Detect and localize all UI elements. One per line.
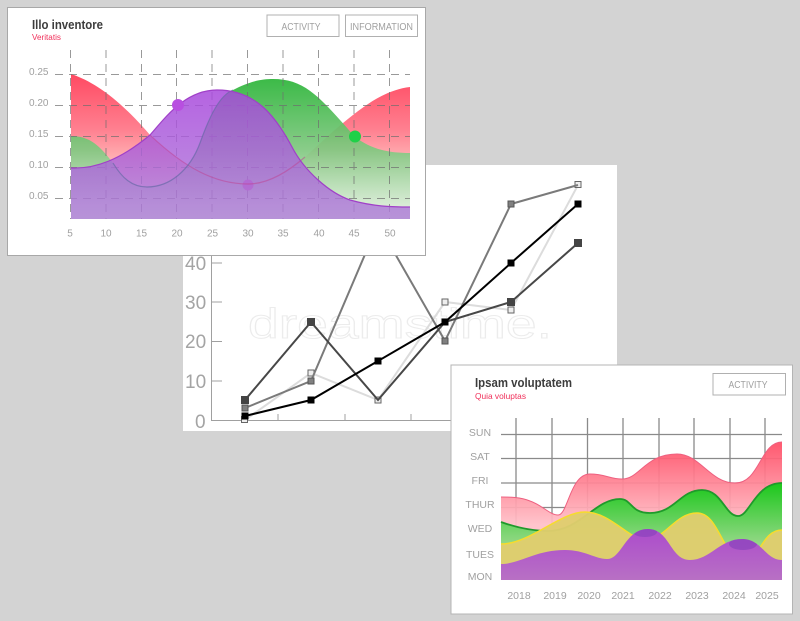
series: light grey (242, 182, 581, 422)
curve line: yellow (501, 512, 782, 560)
line chart y axis labels: 0 (195, 412, 206, 433)
panel: line chart (183, 165, 617, 433)
area: purple (501, 529, 782, 580)
button: activity: ACTIVITY (282, 22, 321, 33)
x axis labels: 2019 (543, 590, 567, 602)
button: information (346, 15, 418, 36)
y axis labels: TUES (466, 549, 494, 561)
x axis labels: 10 (100, 228, 112, 240)
curve line: green (501, 483, 782, 531)
heading: Illo inventore (32, 18, 103, 32)
line chart y axis labels: 40 (185, 254, 206, 275)
y axis labels (465, 427, 495, 583)
subheading: Veritatis (32, 33, 61, 42)
series: dark grey (241, 239, 582, 404)
y axis labels: THUR (465, 499, 495, 511)
line chart y axis labels: 10 (185, 372, 206, 393)
x axis labels: 5 (67, 228, 73, 240)
x axis labels: 2023 (685, 590, 709, 602)
y axis labels: 0.15 (29, 129, 49, 140)
area: yellow (501, 512, 782, 580)
data dot: purple (172, 99, 184, 111)
y axis labels: SAT (470, 451, 490, 463)
data dot: green (349, 130, 361, 142)
x axis labels: 25 (207, 228, 218, 240)
heading: Ipsam voluptatem (475, 376, 572, 390)
x axis labels: 2020 (577, 590, 601, 602)
button: activity (713, 374, 786, 395)
series: mid grey (242, 185, 578, 411)
y axis labels (29, 67, 49, 202)
x axis labels: 20 (171, 228, 183, 240)
y axis labels: WED (468, 523, 493, 535)
curve line: red (501, 442, 782, 515)
subheading: Quia voluptas (475, 391, 526, 401)
line chart axes (211, 255, 460, 420)
y axis labels: MON (468, 571, 492, 583)
button: activity (267, 15, 339, 36)
line chart y axis labels: 30 (185, 293, 206, 314)
y axis labels: SUN (469, 427, 491, 439)
x axis labels: 2024 (722, 590, 746, 602)
x axis labels: 2021 (611, 590, 635, 602)
overlap highlights (633, 527, 757, 550)
area: red (71, 74, 410, 219)
x axis labels: 2025 (755, 590, 779, 602)
x axis labels: 45 (348, 228, 360, 240)
line chart y axis labels: 20 (185, 332, 206, 353)
x axis labels: 35 (277, 228, 289, 240)
watermark: dreamstime. (248, 300, 552, 347)
data dot: pink (242, 180, 254, 190)
x axis labels (507, 590, 779, 602)
x axis labels: 30 (242, 228, 254, 240)
y axis labels: 0.05 (29, 191, 49, 202)
curve line: hidden red (150, 135, 305, 184)
chart grid (501, 418, 782, 530)
x axis labels: 15 (136, 228, 147, 240)
y axis labels: FRI (472, 475, 488, 487)
y axis labels: 0.20 (29, 98, 49, 109)
area: green (71, 79, 410, 219)
y axis labels: 0.25 (29, 67, 49, 78)
panel: Illo inventore (8, 8, 426, 256)
area: purple (71, 90, 410, 219)
x axis labels: 2018 (507, 590, 531, 602)
x axis labels: 50 (384, 228, 396, 240)
button: activity: ACTIVITY (728, 380, 768, 391)
chart grid (55, 50, 410, 219)
x axis labels: 2022 (648, 590, 672, 602)
x axis labels (67, 228, 396, 240)
y axis labels: 0.10 (29, 160, 49, 171)
panel: Ipsam voluptatem (451, 365, 792, 614)
area: green (501, 483, 782, 580)
series: black (242, 200, 582, 420)
button: information: INFORMATION (350, 22, 413, 33)
area: red (501, 442, 782, 580)
x axis labels: 40 (313, 228, 325, 240)
curve line: hidden green (113, 90, 233, 187)
curve line: purple (71, 90, 410, 207)
line chart y axis labels (185, 254, 206, 433)
